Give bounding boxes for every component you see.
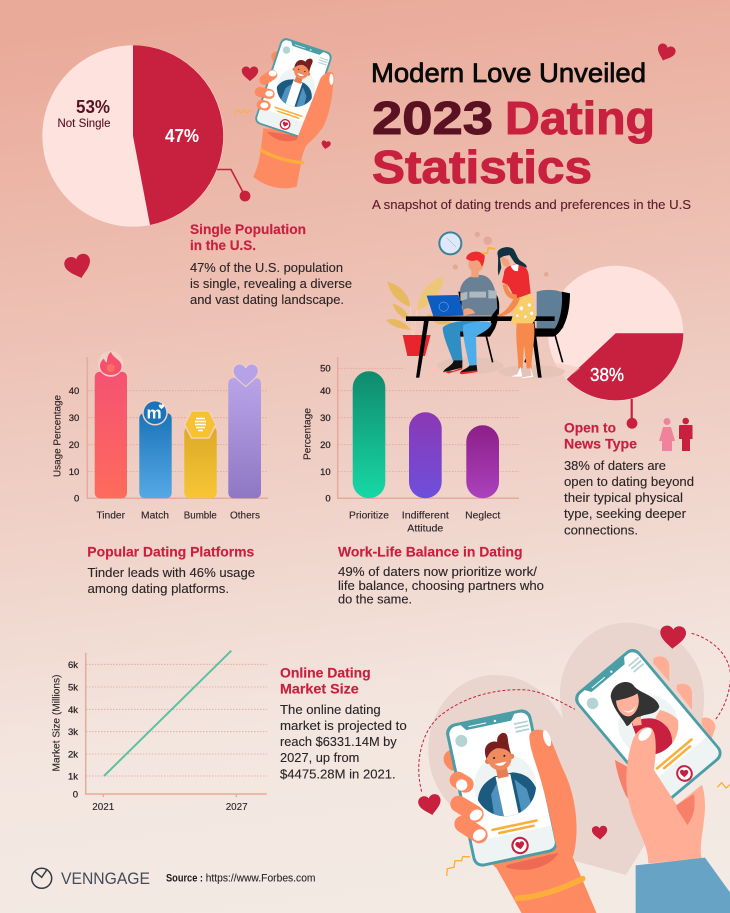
text: online dating market size: 2027, up from	[280, 750, 359, 765]
text: open to new type: open to dating beyond	[564, 474, 694, 489]
bar chart: work-life balance: Indifferent	[402, 510, 449, 521]
bar chart: work-life balance	[303, 357, 519, 535]
bar: Bumble	[184, 411, 217, 498]
source line: Source :	[166, 873, 203, 885]
bar: Match: m	[146, 404, 162, 422]
text: single population	[190, 221, 352, 307]
line chart: market size: 3k	[68, 727, 78, 738]
bar: Match	[139, 400, 172, 498]
text: popular dating platforms: Tinder leads with 46% usage	[88, 565, 255, 580]
title block	[371, 58, 691, 212]
pie chart: open to new type	[548, 266, 683, 429]
title block: A snapshot of dating trends and preferences in the U.S	[372, 197, 691, 212]
text: single population: in the U.S.	[190, 237, 256, 253]
line chart: market size: 6k	[68, 660, 78, 671]
bar: Prioritize	[353, 371, 385, 498]
pie chart: single population	[42, 45, 250, 227]
logo: Venngage	[32, 868, 150, 888]
text: open to new type: 38% of daters are	[564, 458, 666, 473]
bar chart: work-life balance: 50	[320, 364, 331, 375]
text: work-life balance: 49% of daters now prioritize work/	[338, 564, 537, 579]
text: online dating market size: $4475.28M in 2021.	[280, 766, 396, 782]
icon: heart left	[63, 252, 94, 281]
bar chart: dating platforms: Match	[141, 510, 169, 521]
bar chart: work-life balance: 40	[320, 386, 331, 397]
text: online dating market size: market is projected to	[280, 718, 407, 733]
icon: woman and man	[659, 418, 692, 451]
bar chart: dating platforms: Tinder	[96, 510, 126, 521]
logo: Venngage: VENNGAGE	[61, 869, 150, 888]
bar: Neglect	[466, 425, 499, 498]
text: work-life balance: life balance, choosing partners who	[338, 578, 544, 593]
text: online dating market size: Market Size	[280, 680, 359, 696]
bar chart: dating platforms: 30	[69, 413, 79, 424]
text: open to new type: type, seeking deeper	[564, 506, 687, 521]
text: popular dating platforms: among dating platforms.	[88, 581, 229, 596]
text: single population: and vast dating landscape.	[190, 292, 344, 307]
illustration: two hands with phones	[417, 623, 730, 913]
bar chart: work-life balance: Neglect	[465, 510, 500, 521]
line chart: market size: 1k	[68, 772, 78, 782]
bar chart: work-life balance: Prioritize	[349, 510, 389, 521]
source line	[166, 873, 316, 885]
text: online dating market size: Online Dating	[280, 664, 371, 680]
line chart: market size: 2021	[92, 802, 115, 813]
text: open to new type	[564, 419, 694, 538]
illustration: hand holding phone, small	[234, 37, 333, 188]
pie chart: single population: 47%	[165, 126, 199, 146]
trend line	[104, 651, 231, 776]
bar chart: dating platforms	[52, 351, 268, 521]
line chart: market size: 4k	[68, 705, 78, 716]
text: open to new type: News Type	[564, 435, 637, 451]
hand with woman phone	[571, 645, 730, 913]
title block: 2023	[372, 92, 493, 144]
text: open to new type: connections.	[564, 522, 638, 538]
line chart: market size: Market Size (Millions)	[51, 674, 62, 772]
bar chart: dating platforms: 10	[69, 467, 79, 478]
bar chart: work-life balance: 20	[320, 440, 331, 451]
line chart: market size: 0	[73, 790, 78, 800]
bar chart: dating platforms: Bumble	[184, 510, 217, 521]
title block: Statistics	[372, 141, 592, 193]
source line: https://www.Forbes.com	[206, 873, 316, 885]
hand with man phone	[444, 708, 597, 913]
line chart: market size: 5k	[68, 682, 78, 694]
text: popular dating platforms	[87, 544, 255, 596]
text: popular dating platforms: Popular Dating Platforms	[87, 544, 255, 560]
text: single population: is single, revealing a diverse	[190, 276, 352, 291]
illustration: couple at desk	[386, 232, 580, 389]
line chart: market size: 2k	[68, 750, 78, 760]
text: work-life balance: do the same.	[338, 592, 412, 606]
text: online dating market size: reach $6331.14M by	[280, 734, 397, 749]
line chart: market size	[51, 651, 267, 813]
bar chart: work-life balance: Attitude	[407, 524, 444, 535]
text: work-life balance	[338, 544, 544, 606]
bar: Indifferent Attitude	[409, 412, 442, 498]
bar: Others	[228, 364, 261, 498]
text: work-life balance: Work-Life Balance in Dating	[338, 544, 522, 560]
bar chart: work-life balance: 30	[320, 413, 331, 424]
text: open to new type: their typical physical	[564, 490, 683, 505]
text: online dating market size	[280, 664, 407, 782]
bar chart: dating platforms: Others	[230, 510, 260, 521]
icon: heart top right	[654, 42, 677, 64]
text: online dating market size: The online dating	[280, 702, 381, 717]
bar chart: dating platforms: Usage Percentage	[52, 395, 64, 477]
title block: Modern Love Unveiled	[371, 58, 646, 88]
bar chart: work-life balance: 10	[320, 467, 331, 478]
bar chart: dating platforms: 0	[74, 494, 79, 505]
title block: Dating	[505, 92, 655, 144]
text: single population: Single Population	[190, 221, 306, 237]
bar: Tinder	[95, 351, 127, 498]
bar chart: dating platforms: 40	[69, 386, 79, 397]
bar chart: work-life balance: 0	[325, 494, 331, 505]
bar chart: dating platforms: 20	[69, 440, 79, 451]
pie chart: single population: Not Single	[58, 116, 111, 130]
pie chart: single population: 53%	[76, 97, 110, 117]
text: open to new type: Open to	[564, 419, 616, 435]
pie chart: open to new type: 38%	[590, 365, 624, 385]
line chart: market size: 2027	[226, 802, 248, 813]
bar chart: work-life balance: Percentage	[303, 408, 314, 460]
text: single population: 47% of the U.S. population	[190, 260, 343, 275]
